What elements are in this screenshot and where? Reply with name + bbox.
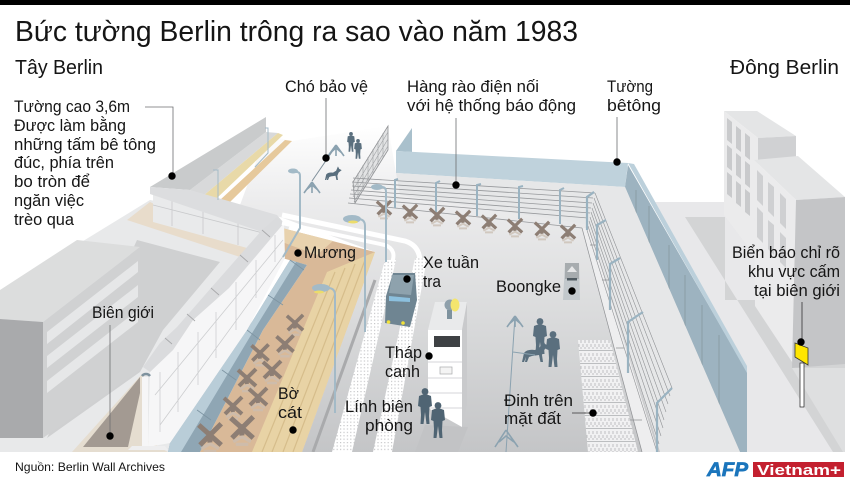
lamp heads	[288, 168, 383, 294]
panel: wall strip illustration	[0, 111, 845, 452]
guards at the tower	[418, 388, 445, 438]
callout: sand bank	[278, 385, 304, 434]
callout: sand bank: cát	[278, 404, 302, 422]
beige sand strip	[200, 228, 375, 452]
callout: wall height: trèo qua	[14, 211, 75, 229]
callout: border: Biên giới	[92, 304, 154, 322]
guards with dog on the strip	[522, 318, 560, 367]
warning sign	[795, 343, 808, 407]
beige strip left of wall	[127, 202, 247, 257]
source note: Nguồn: Berlin Wall Archives	[15, 460, 165, 474]
lamp posts	[213, 128, 386, 413]
anti-tank obstacles, sand strip	[199, 315, 303, 451]
callout: wall height: đúc, phía trên	[14, 154, 114, 172]
sand stripes, far section	[190, 132, 292, 202]
callout: border guards: phòng	[365, 417, 413, 435]
callout: bunker: Boongke	[496, 278, 561, 296]
callout: warning sign: khu vực cấm	[748, 263, 840, 281]
road edge line	[313, 280, 375, 452]
electric fence, rear	[348, 178, 595, 230]
callout: border	[92, 304, 154, 440]
building: rear block, East Berlin	[724, 111, 796, 233]
heading: East Berlin: Đông Berlin	[730, 57, 839, 79]
callout: guard dogs: Chó bảo vệ	[285, 78, 368, 96]
callout: concrete wall: bêtông	[607, 97, 661, 115]
title: Bức tường Berlin trông ra sao vào năm 1983	[15, 16, 578, 48]
ribbed sand bank	[252, 252, 375, 452]
border ditch	[72, 373, 168, 452]
callout: ditch: Mương	[304, 244, 356, 262]
callout: patrol vehicle	[403, 254, 484, 291]
callout: ground spikes: Đinh trên	[504, 392, 573, 410]
callout: guard dogs	[285, 78, 368, 162]
callout: warning sign: tại biên giới	[754, 282, 840, 300]
callout: border guards: Lính biên	[345, 398, 413, 416]
ground: central death strip	[240, 158, 740, 452]
watchtower	[428, 298, 467, 427]
ground between fence and wall	[396, 173, 740, 452]
concrete wall: rear section	[396, 128, 628, 187]
callout: patrol vehicle: Xe tuần	[423, 254, 479, 272]
callout: warning sign: Biển báo chỉ rõ	[732, 244, 840, 262]
callout: sand bank: Bờ	[278, 385, 299, 403]
callout: ground spikes	[504, 392, 597, 428]
building: West Berlin block	[0, 240, 220, 438]
dog-run wire with masts, near	[495, 316, 535, 452]
callout: watchtower: canh	[385, 363, 420, 381]
wall end post	[128, 374, 168, 450]
logo: Vietnam+: Vietnam+	[757, 463, 841, 479]
top black bar	[0, 0, 850, 5]
far wall white face	[153, 195, 260, 248]
guards and dog, far end	[325, 132, 362, 180]
callout: wall height: Tường cao 3,6m	[14, 98, 130, 116]
white road bands	[282, 215, 420, 265]
callout: concrete wall: Tường	[607, 78, 653, 96]
anti-tank obstacles, rear row	[377, 201, 575, 242]
bunker	[563, 263, 580, 300]
electric fence, side	[587, 192, 672, 452]
callout: electric fence: với hệ thống báo động	[407, 97, 576, 115]
callout: electric fence: Hàng rào điện nối	[407, 78, 539, 96]
logo: AFP: AFP	[706, 460, 748, 481]
callout: ground spikes: mặt đất	[504, 410, 561, 428]
spike mat on the ground	[578, 340, 638, 452]
far wall, back face	[150, 117, 266, 190]
logo: Vietnam+	[753, 462, 844, 479]
callout: wall height: Được làm bằng	[14, 116, 126, 135]
wall rounded cap	[143, 187, 284, 372]
callout: watchtower: Tháp	[385, 344, 422, 362]
blue curb	[168, 260, 307, 452]
chain-link fence, diagonal	[353, 126, 388, 203]
dog-run wire with masts, far	[304, 145, 344, 193]
heading: West Berlin: Tây Berlin	[15, 57, 103, 79]
callout: wall height: bo tròn để	[14, 173, 90, 191]
long wall white face	[148, 223, 285, 447]
callout: wall height: ngăn việc	[14, 192, 84, 210]
dotted patrol track, right	[373, 258, 427, 452]
callout: electric fence	[407, 78, 576, 189]
callout: wall height: những tấm bê tông	[14, 136, 156, 154]
ground: West side	[0, 200, 290, 452]
dotted patrol track, left	[332, 260, 396, 452]
fence base strip	[582, 228, 658, 452]
callout: watchtower	[385, 344, 433, 381]
callout: concrete wall	[607, 78, 661, 166]
ditch upper light band	[282, 228, 333, 255]
callout: warning sign	[732, 244, 845, 346]
callout: wall height	[14, 98, 176, 229]
concrete wall: side section	[625, 163, 747, 452]
ground: East side beyond the wall	[655, 202, 845, 452]
patrol vehicle	[385, 273, 417, 327]
callout: patrol vehicle: tra	[423, 273, 442, 291]
building: front block, East Berlin	[754, 156, 845, 368]
